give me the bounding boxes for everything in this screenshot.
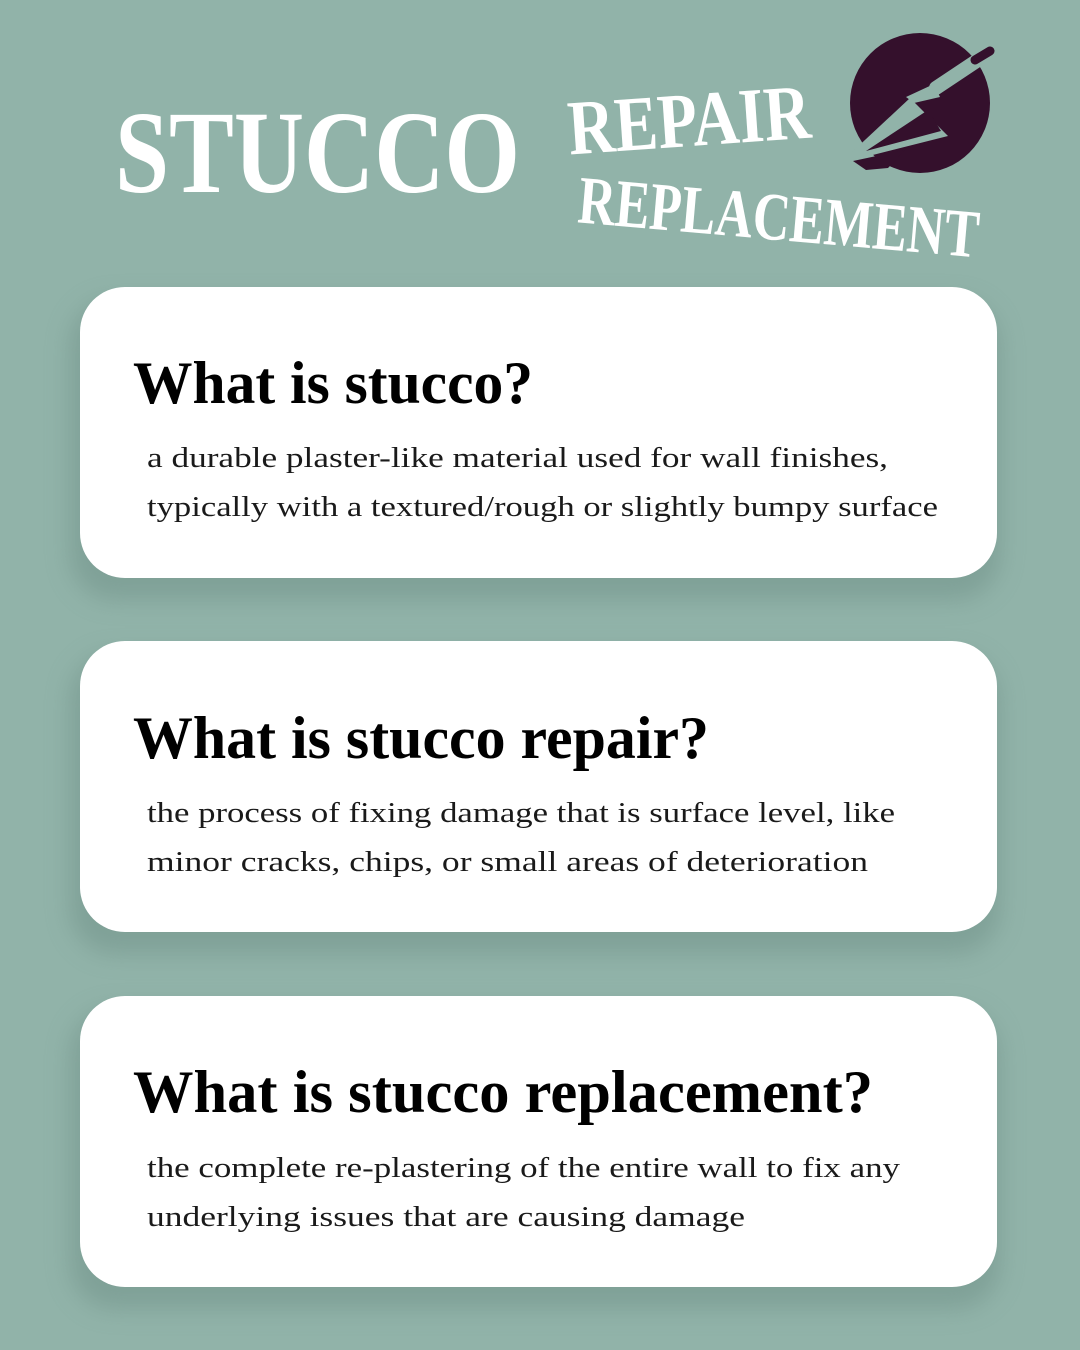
body text: underlying issues that are causing damage bbox=[147, 1201, 745, 1233]
body text: a durable plaster-like material used for wall finishes, bbox=[147, 442, 888, 474]
heading: What is stucco? bbox=[133, 350, 533, 416]
body text: the process of fixing damage that is surface level, like bbox=[147, 797, 895, 829]
subtitle: REPAIR: REPAIR bbox=[565, 68, 815, 171]
body text: typically with a textured/rough or slightly bumpy surface bbox=[147, 491, 938, 523]
panel: what is stucco repair bbox=[70, 641, 1000, 954]
body text: minor cracks, chips, or small areas of deterioration bbox=[147, 846, 869, 878]
panel: what is stucco replacement bbox=[70, 996, 1000, 1309]
icon: trowel bbox=[850, 33, 990, 173]
heading: What is stucco repair? bbox=[133, 705, 709, 771]
body text: the complete re-plastering of the entire wall to fix any bbox=[147, 1152, 901, 1184]
heading: What is stucco replacement? bbox=[133, 1059, 873, 1125]
title: STUCCO: STUCCO bbox=[115, 87, 520, 218]
panel: what is stucco bbox=[70, 287, 1000, 600]
